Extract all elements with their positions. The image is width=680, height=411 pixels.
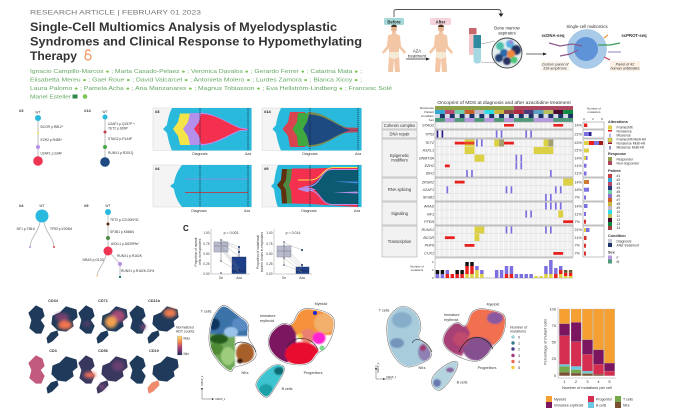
y axis: 75: [552, 323, 556, 328]
gene labels: RUNX1: [422, 228, 434, 232]
panel note: antibodies: human antibodies: [610, 66, 640, 70]
UMAP: CD56: CD56: [98, 349, 108, 353]
fish plot: patient 4: Aza: [244, 209, 250, 213]
legend: sex: F: [616, 256, 619, 260]
box plot: malignant clones: [256, 229, 312, 280]
mutation frequency percentages: 21%: [574, 149, 583, 153]
legend: condition: [608, 234, 639, 247]
category names: Epigenetic: [390, 153, 409, 158]
mutation frequency percentages: 11%: [574, 212, 582, 216]
box plot: malignant cells: 1.00: [203, 231, 210, 235]
UMAP axes: UMAP_2: [200, 375, 204, 386]
fish plot: patient 3: Diagnosis: [192, 152, 208, 156]
legend: patient: 11: [616, 214, 620, 218]
fish plot: patient 14: Aza: [355, 152, 361, 156]
gene labels: TET2: [425, 141, 434, 145]
UMAP: CD3: [29, 349, 77, 393]
UMAP axes: [375, 362, 397, 380]
panel note: amplicons: [541, 61, 570, 71]
box plot: malignant clones: Proportion of mutational: [256, 235, 260, 269]
legend: patient: #1: [616, 174, 620, 178]
tree: patient 9: WT: [105, 204, 111, 208]
UMAP: CD34: CD34: [48, 299, 59, 303]
multiomics heading: Single-cell multiomics: [566, 24, 608, 29]
UMAP axes: UMAP_1: [386, 375, 397, 379]
mutation frequency percentages: 14%: [574, 180, 583, 184]
stacked bar chart: [542, 306, 633, 408]
colour scale legend: Max: [184, 336, 190, 340]
sequencing labels: [542, 33, 647, 38]
category names: [384, 123, 415, 244]
mutation frequency percentages: 7%: [574, 244, 581, 248]
x axis: 5: [608, 379, 611, 384]
mutation number legend: 1: [518, 342, 520, 346]
cluster labels: T cells: [379, 308, 389, 312]
fish plot: patient 4: [153, 165, 252, 213]
annotation row labels: Patient: [424, 110, 434, 114]
cluster labels: Progenitors: [478, 366, 497, 370]
immature, myeloid and progenitor cluster: [268, 308, 336, 366]
colour scale legend: ADT counts: [176, 330, 194, 334]
bar legend: [546, 396, 633, 408]
legend: alterations: [608, 120, 646, 150]
B cell cluster: [256, 364, 285, 398]
fish plot: patient 4: Diagnosis: [191, 209, 207, 213]
gene labels: PHF6: [425, 244, 435, 248]
tree: patient 3: BCOR p.R812*: [40, 125, 64, 129]
bone marrow label: Bone marrow: [494, 26, 521, 30]
UMAP axes: UMAP_2: [376, 362, 380, 373]
legend: response: Responder: [616, 157, 634, 161]
gene labels: ASXL1: [422, 149, 434, 153]
oncoprint title: Oncoprint of MDS at diagnosis and after azacitidine treatment: [437, 100, 571, 106]
arrow to multiomics: [526, 52, 547, 56]
mutation frequency percentages: [574, 124, 583, 256]
UMAP axes: UMAP_1: [215, 397, 226, 401]
mutation number legend: 0: [518, 336, 520, 340]
T cell cluster: [386, 306, 432, 368]
mutation frequency percentages: 7%: [574, 196, 581, 200]
tree: patient 14: #14: [84, 108, 91, 113]
tree: patient 3: WT: [35, 110, 41, 114]
workflow schematic: [382, 10, 647, 72]
nonsense: [445, 124, 573, 255]
annotation row labels: [420, 106, 434, 122]
legend: response: Non-responder: [616, 161, 640, 165]
cluster labels: erythroid: [260, 319, 274, 323]
x axis: [562, 379, 612, 390]
legend: alterations: Alterations: [608, 120, 628, 124]
mutation count side bars: [583, 106, 604, 257]
panel note: antibodies: [610, 61, 640, 71]
gene labels: PTEN: [424, 220, 434, 224]
mutations per sample bars: [410, 258, 573, 280]
UMAP: CD56: [79, 349, 127, 393]
cluster labels: NKs: [242, 371, 249, 375]
mutation frequency percentages: 21%: [574, 132, 583, 136]
box plot: malignant cells: [194, 229, 250, 280]
box plot: malignant clones: On: [282, 276, 286, 280]
T cell cluster: [208, 305, 256, 372]
immature and myeloid clusters: [442, 308, 506, 362]
treatment arrow: [406, 48, 430, 60]
legend: patient: 13: [616, 222, 620, 226]
tree: patient 3: [19, 108, 64, 166]
gene labels: ARAS: [423, 204, 435, 208]
bar legend: T cells: [623, 398, 633, 402]
gene labels: SF3B1: [423, 196, 434, 200]
tree: patient 14: U2AF1 p.Q157P +: [108, 122, 135, 126]
tree: patient 9: ASXL1 p.D839Pfs*: [111, 242, 140, 246]
protein expression UMAP grid: [29, 299, 194, 393]
authors: Laura Palomo ● ; Pamela Acha ● ; Ana Manzanares ● ; Magnus Tobiasson ● ; Eva Hellström-Lindberg ● ; Francesc Solé: [30, 86, 392, 92]
panel note: antibodies: Panel of 42: [616, 62, 634, 66]
box plot: malignant cells: 0.00: [203, 272, 210, 276]
gene labels: [419, 124, 435, 256]
x axis: 1: [563, 379, 566, 384]
legend: response: Response: [608, 152, 626, 156]
legend: patient: 12: [616, 218, 620, 222]
tree: patient 14: WT: [102, 110, 108, 114]
gene labels: CUX1: [424, 252, 434, 256]
legend: patient: #7: [616, 198, 620, 202]
clonal trees: [17, 108, 154, 278]
legend: alterations: Frameshift Multi-Hit: [616, 138, 646, 142]
fish plots: [153, 108, 362, 213]
gene labels: TP53: [425, 132, 435, 136]
legend: patient: 10: [616, 210, 620, 214]
cluster labels: NKs: [419, 366, 426, 370]
gene labels: NF1: [427, 212, 434, 216]
legend: patient: [608, 169, 621, 230]
mutation frequency percentages: 11%: [574, 164, 582, 168]
tree: patient 9: #9: [84, 203, 89, 208]
mutation number legend: mutations: [510, 330, 526, 334]
legend: sex: [608, 250, 620, 264]
fish plot: patient 14: #14: [264, 109, 271, 114]
y axis: [542, 306, 616, 378]
y axis: 100: [550, 306, 557, 312]
before label: [384, 18, 404, 25]
frameshift: [465, 140, 573, 241]
legend: alterations: Frameshift: [616, 126, 633, 130]
bar legend: Myeloid: [554, 398, 566, 402]
box plot: malignant cells: Aza: [236, 276, 242, 280]
box plot: malignant cells: 0.25: [203, 262, 210, 266]
tree: patient 9: SF3B1 p.K666N: [110, 230, 134, 234]
tree: patient 14: RUNX1 p.R201Q: [108, 151, 134, 155]
gene labels: ZRSR2: [421, 180, 434, 184]
cluster labels: Myeloid: [315, 302, 327, 306]
box plot: malignant clones: 1.00: [266, 231, 273, 235]
mutation count side bars: Number of: [587, 106, 601, 110]
mutation count side bars: 0: [583, 117, 585, 121]
legend: patient: #6: [616, 194, 620, 198]
icon: patient before: [382, 25, 406, 72]
panel note: amplicons: Custom panel of: [542, 62, 569, 66]
cluster labels: erythroid: [444, 318, 458, 322]
icon: sample tubes: [469, 28, 481, 64]
category names: RNA splicing: [388, 187, 412, 192]
legend: condition: After treatment: [616, 243, 639, 247]
before label: Before: [387, 20, 401, 24]
legend: alterations: Missense: [616, 134, 631, 138]
category names: modifiers: [391, 158, 408, 162]
authors: Elisabetta Mereu ● ; Gael Roue ● ; David Valcárcel ● ; Antonieta Molero ● ; Lurdes Zamora ● ; Blanca Xicoy ● ;: [30, 78, 362, 84]
mutations per sample bars: 2: [432, 268, 434, 272]
category label boxes: [382, 122, 417, 257]
UMAP: CD11b: [130, 299, 178, 343]
box plot: malignant clones: 0.50: [266, 252, 273, 256]
cluster labels: [379, 302, 499, 384]
mutation frequency percentages: 43%: [574, 141, 583, 145]
box plot: malignant cells: Proportion of mutant: [194, 237, 198, 266]
tree: patient 4: WT: [39, 204, 45, 208]
legend: patient: #8: [616, 202, 620, 206]
legend: alterations: Nonsense Multi-Hit: [616, 142, 645, 146]
UMAP: CD19: [130, 349, 178, 393]
box plot: malignant cells: On: [219, 276, 223, 280]
after label: [430, 18, 451, 25]
icon: patient after: [429, 25, 453, 72]
after label: After: [436, 20, 446, 24]
bracket arrow: [394, 10, 501, 17]
fish plot: patient 14: [262, 108, 362, 156]
authors: [30, 69, 392, 100]
fish plot: patient 9: Aza: [354, 209, 360, 213]
box plot: malignant cells: p = 0.003: [224, 231, 238, 235]
tree: patient 4: NF1 p.T561I: [17, 227, 35, 231]
mutations per sample bars: 0: [432, 276, 434, 280]
article header: [30, 10, 392, 100]
fish plot: patient 9: Diagnosis: [301, 209, 317, 213]
gene labels: DNMT3A: [419, 157, 435, 161]
mutations per sample bars: 4: [432, 260, 434, 264]
UMAP: CD34: [29, 299, 77, 343]
category names: DNA repair: [389, 132, 410, 136]
sequencing labels: scPROT-seq: [621, 33, 647, 38]
UMAP axes: [200, 375, 226, 401]
missense: [437, 130, 562, 234]
tree: patient 3: EZH2 p.R485*: [40, 138, 62, 142]
tree: patient 9: NRAS p.G12D: [83, 258, 105, 262]
gene labels: STAG2: [422, 124, 434, 128]
bar legend: B cells: [596, 404, 607, 408]
UMAP: CD11b: CD11b: [148, 299, 161, 303]
UMAP: CD71: [79, 299, 127, 343]
box plot: malignant clones: Aza: [299, 276, 305, 280]
colour scale legend: [176, 326, 194, 356]
box plots: [194, 229, 312, 280]
category names: Cohesin complex: [384, 123, 415, 128]
mutation count side bars: 8: [601, 117, 603, 121]
UMAP: CD3: CD3: [49, 349, 57, 353]
tree: patient 4: [17, 203, 72, 248]
legend: sex: M: [616, 260, 620, 264]
panel letter C: C: [183, 224, 189, 233]
box plot: malignant clones: 0.00: [266, 272, 273, 276]
box plot: malignant cells: 0.50: [203, 252, 210, 256]
legend: alterations: Nonsense: [616, 130, 632, 134]
bar legend: Progenitor: [596, 398, 613, 402]
mutations per sample bars: Number of: [410, 264, 424, 268]
mutation number legend: 5: [518, 366, 520, 370]
tree: patient 4: TP53 p.V204M: [50, 227, 72, 231]
mutation count side bars: mutations: [587, 110, 601, 114]
tree: patient 3: U2AF1 p.S34F: [40, 152, 62, 156]
fish plot: patient 9: #9: [264, 166, 269, 171]
tree: patient 9: [83, 203, 154, 278]
cluster labels: B cells: [282, 387, 293, 391]
mutation count UMAP: [375, 300, 528, 396]
cell type UMAP: [200, 300, 340, 402]
fish plot: patient 14: Diagnosis: [302, 152, 318, 156]
gene labels: EZH2: [425, 164, 434, 168]
legend: patient: #3: [616, 182, 620, 186]
box plot: malignant clones: 0.75: [266, 242, 273, 246]
x axis: 4: [597, 379, 600, 384]
fish plot: patient 9: [262, 165, 362, 213]
cluster labels: B cells: [457, 380, 468, 384]
alteration matrix: [435, 122, 573, 257]
mutation frequency percentages: 14%: [574, 157, 583, 161]
legend: patient: #5: [616, 190, 620, 194]
box plot: malignant clones: 0.25: [266, 262, 273, 266]
annotation row labels: Condition: [421, 114, 434, 118]
cluster labels: Immature: [444, 313, 460, 317]
mutation frequency percentages: 21%: [574, 228, 583, 232]
colour scale legend: Min: [184, 352, 189, 356]
box plot: malignant cells: 0.75: [203, 242, 210, 246]
UMAP: CD19: CD19: [149, 349, 159, 353]
y axis: 25: [552, 356, 556, 361]
legend: patient: 14: [616, 226, 620, 230]
icon: bone marrow sample: [481, 38, 522, 68]
category names: Signaling: [391, 211, 409, 216]
cluster labels: Myeloid: [487, 302, 499, 306]
icon: open access lock: [85, 50, 91, 60]
fish plot: patient 4: #4: [155, 166, 160, 171]
oncoprint: [382, 100, 646, 280]
title: Syndromes and Clinical Response to Hypomethylating: [30, 34, 362, 48]
bars: [559, 309, 615, 376]
authors: Manel Esteller: [30, 94, 71, 100]
mutation frequency percentages: 7%: [574, 220, 581, 224]
cluster labels: [201, 302, 327, 391]
gene labels: BCOR: [423, 236, 434, 240]
title: Single-Cell Multiomics Analysis of Myelodysplastic: [30, 20, 337, 34]
tree: patient 14: STAG2 p.P144P: [108, 137, 133, 141]
tree: patient 9: RUNX1 p.R162K-C5%: [121, 269, 154, 273]
title: [30, 20, 362, 63]
treatment arrow: treatment: [408, 54, 427, 58]
cluster labels: T cells: [201, 310, 211, 314]
bar legend: Immature erythroid: [554, 404, 583, 408]
tree: patient 3: #3: [19, 108, 24, 113]
annotation tracks: [435, 106, 573, 122]
mutation count side bars: 2: [592, 117, 594, 121]
legend: condition: Condition: [608, 234, 626, 238]
tree: patient 14: TET2 p.S99P: [108, 126, 129, 130]
mutation frequency percentages: 18%: [574, 188, 583, 192]
bone marrow label: aspirates: [498, 30, 516, 36]
legend: patient: #2: [616, 178, 620, 182]
mutation frequency percentages: 14%: [574, 124, 583, 128]
colour scale legend: Normalized: [176, 326, 194, 330]
treatment arrow: AZA: [413, 48, 421, 54]
mutation frequency percentages: 14%: [574, 204, 583, 208]
annotation row labels: Response: [420, 106, 434, 110]
legend: patient: Patient: [608, 169, 621, 173]
mutation number legend: 2: [518, 348, 520, 352]
mutation number legend: 4: [518, 360, 520, 364]
box plot: malignant clones: burden clones in responders: [260, 231, 264, 272]
B cell cluster: [431, 360, 458, 391]
legend: sex: Sex: [608, 250, 616, 254]
tree: patient 9: RUNX1 p.R162K: [117, 254, 143, 258]
mutation number legend: [510, 326, 528, 370]
gene labels: U2AF1: [423, 188, 434, 192]
bone marrow label: [494, 26, 521, 36]
gene labels: IDH1: [426, 172, 434, 176]
fish plot: patient 3: [153, 108, 252, 156]
icon: single cell: [549, 30, 621, 68]
legend: patient: #9: [616, 206, 620, 210]
sequencing labels: scDNA-seq: [542, 33, 565, 38]
authors: Ignacio Campillo-Marcos ● ; Marta Casado-Pelaez ● ; Veronica Davalos ● ; Gerardo Ferrer ● ; Catarina Mata ● ;: [30, 69, 362, 75]
legend: response: [608, 152, 640, 165]
y axis: Percentage of mutant cells: [542, 319, 548, 365]
box plot: malignant cells: cells in responders: [198, 238, 202, 265]
mutation frequency percentages: 11%: [574, 172, 582, 176]
mutation number legend: Number of: [510, 326, 528, 330]
x axis: 3: [586, 379, 589, 384]
legend: alterations: Missense Multi-Hit: [616, 146, 644, 150]
category names: Transcription: [388, 239, 412, 244]
UMAP: CD71: CD71: [98, 299, 108, 303]
fish plot: patient 3: #3: [155, 109, 160, 114]
annotation row labels: Sex: [429, 118, 434, 122]
mutation number legend: 3: [518, 354, 520, 358]
oncoprint legend: [608, 120, 646, 264]
article type and date: RESEARCH ARTICLE | FEBRUARY 01 2023: [30, 10, 201, 16]
mutation frequency percentages: 7%: [574, 252, 581, 256]
x axis: Number of mutations per cell: [562, 385, 612, 390]
mutations per sample bars: mutations: [411, 268, 424, 272]
legend: patient: #4: [616, 186, 620, 190]
mutation frequency percentages: 11%: [574, 236, 582, 240]
legend: condition: Diagnosis: [616, 239, 632, 243]
tree: patient 9: TET2 p.C2130N*31: [110, 218, 139, 222]
y axis: 0: [554, 373, 557, 378]
box plot: malignant clones: p = 0.014: [286, 231, 300, 235]
y axis: 50: [552, 340, 557, 344]
tree: patient 14: [84, 108, 135, 167]
cluster labels: Immature: [260, 314, 276, 318]
bar legend: NKs: [623, 404, 630, 408]
cluster labels: Progenitors: [304, 371, 323, 375]
x axis: 2: [575, 379, 577, 384]
panel note: amplicons: 318 amplicons: [543, 66, 567, 70]
tree: patient 4: #4: [19, 203, 24, 208]
title: Therapy: [30, 49, 77, 63]
fish plot: patient 3: Aza: [245, 152, 251, 156]
